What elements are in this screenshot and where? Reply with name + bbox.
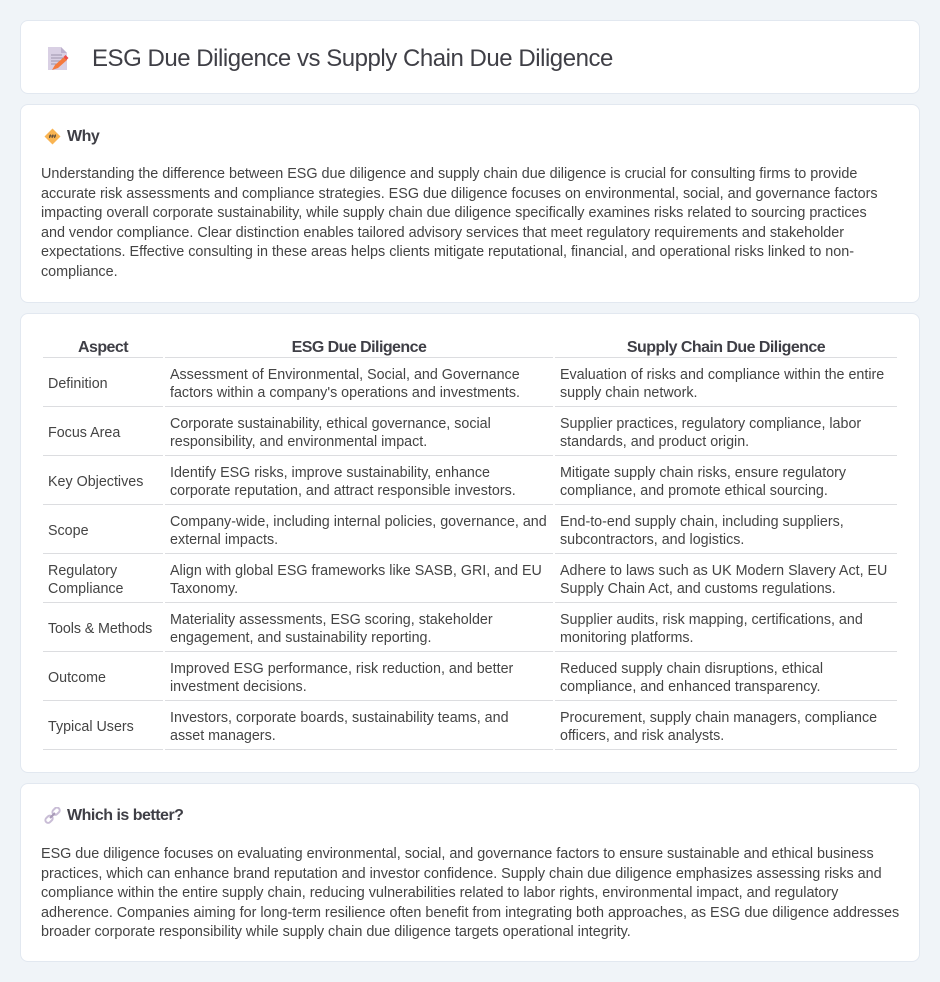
cell: ESG key objectives [170, 465, 516, 499]
cell: ESG focus area: Corporate sustainability, ethical governance, social [170, 416, 491, 432]
cell: supply chain definition: supply chain network. [560, 385, 697, 401]
text block: which is better: ESG due diligence focuses on evaluating environmental, social, and governance factors to ensure sustainable and ethical business [41, 846, 874, 862]
text block: which is better [41, 846, 899, 940]
cell: ESG regulatory compliance: Align with global ESG frameworks like SASB, GRI, and EU [170, 563, 542, 579]
cell: supply chain tools and methods: monitoring platforms. [560, 630, 694, 646]
heading: which is better: Which is better? [67, 807, 183, 824]
cell: ESG focus area [170, 416, 491, 450]
cell: ESG typical users: asset managers. [170, 728, 276, 744]
panel: which is better [20, 783, 920, 962]
cell: ESG tools and methods: engagement, and sustainability reporting. [170, 630, 431, 646]
panel: header [20, 20, 920, 94]
panel: why [20, 104, 920, 303]
table header: aspect: Aspect [78, 339, 128, 356]
cell: supply chain typical users: officers, and risk analysts. [560, 728, 724, 744]
cell: ESG outcome [170, 661, 514, 695]
cell: supply chain typical users [560, 710, 877, 744]
cell: supply chain key objectives: compliance, and promote ethical sourcing. [560, 483, 828, 499]
cell: supply chain definition [560, 367, 884, 401]
cell: supply chain definition: Evaluation of risks and compliance within the entire [560, 367, 884, 383]
title: ESG Due Diligence vs Supply Chain Due Diligence [92, 45, 613, 72]
cell: ESG tools and methods: Materiality assessments, ESG scoring, stakeholder [170, 612, 493, 628]
cell: supply chain typical users: Procurement, supply chain managers, compliance [560, 710, 877, 726]
cell: ESG scope [170, 514, 547, 548]
cell: ESG outcome: Improved ESG performance, risk reduction, and better [170, 661, 513, 677]
cell: ESG definition [170, 367, 520, 401]
heading: why: Why [67, 128, 99, 145]
cell: supply chain regulatory compliance: Adhere to laws such as UK Modern Slavery Act, EU [560, 563, 887, 579]
cell: ESG typical users: Investors, corporate boards, sustainability teams, and [170, 710, 509, 726]
row: regulatory compliance: Regulatory [48, 563, 117, 579]
row: tools and methods: Tools & Methods [48, 621, 152, 637]
cell: supply chain scope [560, 514, 844, 548]
cell: ESG definition: Assessment of Environmental, Social, and Governance [170, 367, 520, 383]
cell: supply chain focus area: standards, and product origin. [560, 434, 749, 450]
cell: supply chain outcome [560, 661, 823, 695]
text block: why [41, 166, 878, 280]
icon: chain link [44, 807, 61, 824]
text block: which is better: adherence. Companies aiming for long-term resilience often benefit from integrating both approaches, as ESG due diligence addresses [41, 905, 899, 921]
cell: supply chain regulatory compliance: Supply Chain Act, and customs regulations. [560, 581, 836, 597]
cell: supply chain focus area: Supplier practices, regulatory compliance, labor [560, 416, 861, 432]
row: scope: Scope [48, 523, 89, 539]
text block: why: and vendor compliance. Clear distinction enables tailored advisory services that meet regulatory requirements and stakeholder [41, 225, 844, 241]
table header: supply chain due diligence: Supply Chain Due Diligence [627, 339, 825, 356]
cell: supply chain outcome: compliance, and enhanced transparency. [560, 679, 820, 695]
row: regulatory compliance: Compliance [48, 581, 124, 597]
cell: ESG regulatory compliance [170, 563, 542, 597]
cell: ESG focus area: responsibility, and environmental impact. [170, 434, 427, 450]
text block: why: expectations. Effective consulting in these areas helps clients mitigate reputational, financial, and operational risks linked to non- [41, 244, 854, 260]
cell: supply chain regulatory compliance [560, 563, 887, 597]
icon: document with pencil [48, 47, 68, 70]
cell: ESG key objectives: corporate reputation, and attract responsible investors. [170, 483, 516, 499]
table header: ESG due diligence: ESG Due Diligence [292, 339, 426, 356]
cell: supply chain outcome: Reduced supply chain disruptions, ethical [560, 661, 823, 677]
cell: ESG scope: Company-wide, including internal policies, governance, and [170, 514, 547, 530]
row: key objectives: Key Objectives [48, 474, 143, 490]
cell: supply chain focus area [560, 416, 861, 450]
row: outcome: Outcome [48, 670, 106, 686]
row: definition: Definition [48, 376, 108, 392]
cell: ESG tools and methods [170, 612, 493, 646]
row: focus area: Focus Area [48, 425, 120, 441]
row: regulatory compliance [48, 563, 124, 597]
cell: supply chain tools and methods [560, 612, 863, 646]
text block: why: impacting overall corporate sustainability, while supply chain due diligence specifically examines risks related to sourcing practices [41, 205, 867, 221]
cell: supply chain key objectives [560, 465, 846, 499]
icon: warning diamond [44, 128, 60, 144]
text block: why: accurate risk assessments and compliance strategies. ESG due diligence focuses on environmental, social, and governance factors [41, 186, 878, 202]
cell: supply chain key objectives: Mitigate supply chain risks, ensure regulatory [560, 465, 846, 481]
cell: supply chain tools and methods: Supplier audits, risk mapping, certifications, and [560, 612, 863, 628]
text block: why: compliance. [41, 264, 118, 280]
text block: which is better: broader corporate responsibility while supply chain due diligence targets operational integrity. [41, 924, 631, 940]
text block: why: Understanding the difference between ESG due diligence and supply chain due diligence is crucial for consulting firms to provide [41, 166, 857, 182]
panel: comparison table [20, 313, 920, 773]
cell: ESG typical users [170, 710, 509, 744]
row: typical users: Typical Users [48, 719, 134, 735]
cell: ESG definition: factors within a company's operations and investments. [170, 385, 520, 401]
cell: ESG regulatory compliance: Taxonomy. [170, 581, 238, 597]
text block: which is better: practices, which can enhance brand reputation and investor confidence. Supply chain due diligence emphasizes assessing risks and [41, 866, 882, 882]
cell: ESG key objectives: Identify ESG risks, improve sustainability, enhance [170, 465, 490, 481]
text block: which is better: compliance within the entire supply chain, reducing vulnerabilities related to labor rights, environmental impact, and regulatory [41, 885, 838, 901]
cell: supply chain scope: subcontractors, and logistics. [560, 532, 744, 548]
cell: supply chain scope: End-to-end supply chain, including suppliers, [560, 514, 844, 530]
cell: ESG outcome: investment decisions. [170, 679, 307, 695]
cell: ESG scope: external impacts. [170, 532, 278, 548]
